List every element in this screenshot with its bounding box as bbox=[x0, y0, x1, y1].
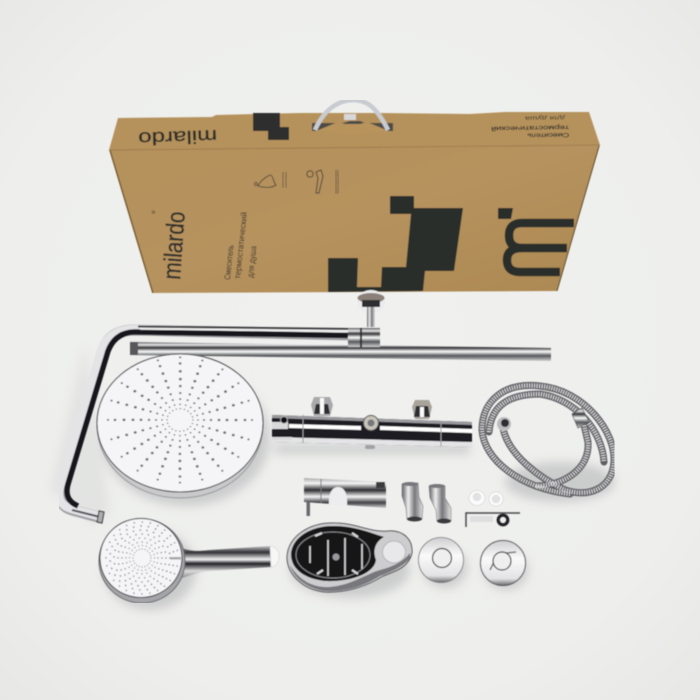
soap dish bbox=[287, 523, 412, 592]
shadows bbox=[50, 345, 615, 610]
flap logo text: milardo bbox=[138, 126, 218, 149]
large black graphic bbox=[328, 196, 463, 292]
all objects bbox=[59, 100, 614, 603]
dish tray rim bbox=[287, 523, 412, 592]
cardboard box bbox=[109, 100, 600, 293]
handle bbox=[182, 546, 272, 578]
hose connector left bbox=[497, 417, 511, 431]
elbow connector left bbox=[402, 482, 423, 522]
mixer highlights bbox=[272, 415, 472, 425]
hose coil texture bbox=[482, 385, 614, 494]
hand head face bbox=[100, 518, 182, 598]
flap black block bbox=[253, 113, 289, 140]
bracket clamp detail bbox=[376, 482, 385, 488]
large m logo bbox=[498, 208, 574, 272]
registered mark: ® bbox=[150, 210, 157, 214]
wall bracket bbox=[348, 290, 385, 347]
mixer centre screw bbox=[364, 416, 378, 430]
front logo text: milardo bbox=[158, 211, 191, 280]
thermostatic mixer bbox=[272, 397, 472, 449]
dish bottom chrome bbox=[290, 553, 410, 591]
head rim bbox=[97, 354, 263, 498]
handle slot bbox=[312, 121, 393, 131]
slide bracket bbox=[304, 478, 386, 516]
hose connector right bbox=[572, 408, 589, 428]
hand head rim bbox=[99, 519, 185, 603]
care icon: hands bbox=[254, 172, 286, 188]
head face bbox=[97, 354, 263, 492]
rain shower head bbox=[97, 354, 263, 498]
flap product text line 3: для душа bbox=[524, 114, 565, 121]
flap product text: Смеситель bbox=[527, 131, 569, 139]
care icon: mixer bbox=[307, 170, 338, 194]
dish black tray bbox=[291, 526, 384, 581]
wall flange left bbox=[418, 538, 464, 582]
arm end cap bbox=[97, 511, 104, 523]
white rings bbox=[469, 490, 503, 506]
bracket opening bbox=[329, 487, 347, 506]
mixer bottom screw bbox=[365, 445, 375, 449]
hex key and washer bbox=[466, 513, 520, 527]
mixer inlet right bbox=[412, 400, 432, 419]
nozzle dots bbox=[108, 357, 252, 483]
handle tip bbox=[270, 546, 279, 567]
mixer body bbox=[272, 415, 472, 447]
flap product text bbox=[490, 124, 569, 139]
box top flap bbox=[109, 112, 600, 150]
bracket clamp bbox=[348, 328, 380, 347]
elbow connector right bbox=[429, 484, 451, 524]
hand head selector bbox=[170, 557, 181, 560]
dish inner ring bbox=[296, 532, 370, 578]
flap product text: термостатический bbox=[490, 124, 569, 132]
riser pipe bbox=[130, 342, 551, 361]
hose base bbox=[482, 385, 614, 494]
box front face bbox=[109, 145, 600, 293]
dish white clip bbox=[382, 541, 406, 563]
shower hose bbox=[482, 385, 614, 494]
dish drain bbox=[332, 554, 340, 560]
mixer lever detail bbox=[280, 416, 288, 424]
hand head dots bbox=[106, 522, 178, 594]
handle bbox=[315, 100, 388, 130]
bracket pin bbox=[306, 502, 310, 516]
front product text: для душа bbox=[245, 245, 258, 278]
bracket disc bbox=[357, 290, 385, 314]
wall flange right bbox=[480, 540, 526, 586]
hand shower bbox=[99, 518, 279, 603]
front product text bbox=[222, 211, 258, 280]
dish slots bbox=[310, 533, 362, 576]
front product text: термостатический bbox=[232, 211, 249, 279]
front product text: Смеситель bbox=[222, 244, 236, 280]
mixer inlet left bbox=[311, 397, 333, 416]
shower arm bbox=[59, 326, 350, 523]
